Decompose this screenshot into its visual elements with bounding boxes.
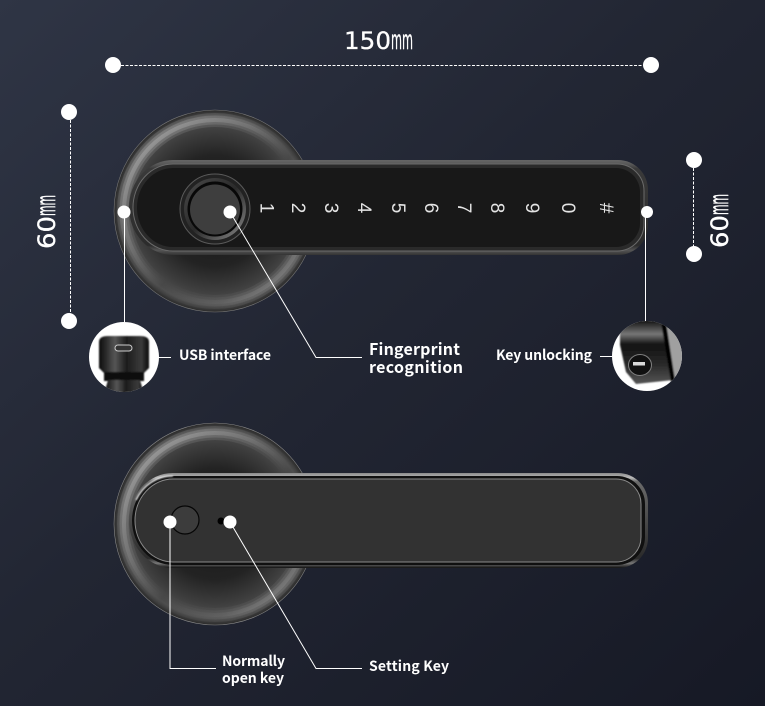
callout: normally open key: open key xyxy=(222,668,284,688)
dimension: 60mm height of rose: 60mm xyxy=(31,195,62,249)
keypad digits: 5 xyxy=(387,203,408,213)
keypad digits: 1 xyxy=(256,203,276,213)
keypad digits: 8 xyxy=(486,203,507,213)
callout: fingerprint recognition xyxy=(224,206,463,378)
keypad digits: 6 xyxy=(420,203,441,213)
callout: key unlocking xyxy=(496,206,684,392)
back lock handle xyxy=(114,423,648,625)
rose plate xyxy=(114,423,316,625)
lever xyxy=(129,160,648,255)
callout: USB interface xyxy=(89,206,271,394)
dimension: 150mm width xyxy=(105,25,659,73)
fingerprint sensor xyxy=(180,174,250,244)
callout: setting key xyxy=(224,516,449,676)
front lock handle xyxy=(114,110,648,312)
callout: USB interface: USB interface xyxy=(179,345,271,365)
callout: normally open key xyxy=(164,516,285,688)
icon: USB port detail xyxy=(89,322,159,394)
setting key hole xyxy=(218,518,224,524)
rose plate xyxy=(114,110,316,312)
dimension: 60mm right xyxy=(686,152,735,262)
lever xyxy=(129,473,648,568)
keypad digits: 9 xyxy=(521,203,542,213)
icon: key cylinder detail xyxy=(612,320,684,392)
dimension: 150mm width: 150mm xyxy=(344,25,413,56)
keypad digits: 7 xyxy=(453,203,474,213)
callout: fingerprint recognition: recognition xyxy=(369,354,463,378)
callout: normally open key: Normally xyxy=(222,651,285,671)
keypad digits: 2 xyxy=(287,203,308,213)
dimension: 60mm right: 60mm xyxy=(704,194,735,248)
keypad digits: 3 xyxy=(320,203,341,213)
keypad digits: 0 xyxy=(557,203,578,213)
callout: fingerprint recognition: Fingerprint xyxy=(369,336,460,360)
normally open key button xyxy=(171,506,199,534)
callout: key unlocking: Key unlocking xyxy=(496,345,593,365)
keypad digits: # xyxy=(595,203,616,214)
keypad digits: 4 xyxy=(353,203,374,214)
dimension: 60mm height of rose xyxy=(31,104,77,329)
keypad digits xyxy=(256,203,616,214)
callout: setting key: Setting Key xyxy=(369,656,449,676)
